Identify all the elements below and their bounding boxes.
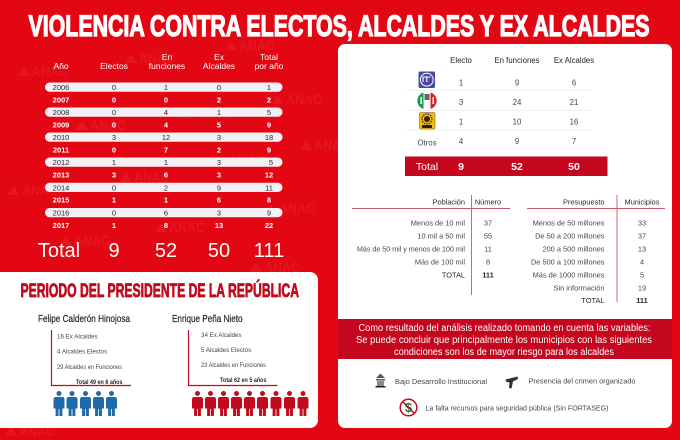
panel: yearly table bbox=[38, 52, 284, 262]
table header bbox=[53, 52, 284, 71]
table header: Total bbox=[260, 52, 278, 62]
icons: people red bbox=[192, 391, 308, 416]
party rows: 9 bbox=[515, 137, 519, 146]
table: budget: 200 a 500 millones bbox=[542, 244, 605, 254]
table rows: 8 bbox=[164, 221, 168, 230]
callout band: condiciones son los de mayor riesgo para los alcaldes bbox=[394, 347, 614, 358]
party totals: 50 bbox=[568, 161, 580, 173]
table rows: 2016 bbox=[53, 208, 69, 217]
table: budget: De 500 a 100 millones bbox=[531, 258, 605, 266]
table rows: 2014 bbox=[53, 183, 69, 192]
table rows: 1 bbox=[164, 83, 168, 92]
party totals: 9 bbox=[458, 161, 464, 173]
table header: En bbox=[162, 52, 172, 62]
table rows: 4 bbox=[164, 121, 169, 130]
table: budget: 13 bbox=[638, 244, 646, 254]
table: budget: 33 bbox=[638, 218, 646, 228]
table rows: 3 bbox=[217, 171, 221, 180]
table rows: 1 bbox=[112, 221, 116, 230]
table: budget: 111 bbox=[636, 296, 648, 305]
table header: Alcaldes bbox=[203, 61, 235, 71]
table totals bbox=[38, 240, 284, 262]
table rows: 12 bbox=[265, 171, 273, 180]
table rows: 7 bbox=[164, 146, 168, 155]
table rows: 1 bbox=[267, 83, 271, 92]
text: organized crime: Presencia del crimen organizado bbox=[528, 378, 636, 386]
table: budget: Sin información bbox=[554, 284, 604, 292]
table rows: 12 bbox=[162, 133, 170, 142]
table rows: 0 bbox=[112, 208, 116, 217]
icon: PRI logo bbox=[417, 92, 437, 109]
party rows: 16 bbox=[570, 118, 578, 126]
table rows: 3 bbox=[112, 171, 116, 180]
party table: Ex Alcaldes bbox=[554, 56, 594, 65]
table: population: 10 mil a 50 mil bbox=[417, 232, 465, 240]
table: budget: TOTAL bbox=[581, 296, 604, 305]
party rows: 10 bbox=[513, 118, 522, 126]
table: population: 111 bbox=[482, 270, 494, 280]
party rows: 21 bbox=[570, 98, 578, 107]
block: Peña Nieto: Total 62 en 5 años bbox=[220, 377, 267, 384]
table rows: 2 bbox=[217, 96, 221, 105]
block: Calderón: Felipe Calderón Hinojosa bbox=[38, 313, 130, 325]
table rows: 9 bbox=[217, 183, 221, 192]
table rows: 9 bbox=[267, 208, 271, 217]
table rows: 5 bbox=[269, 158, 273, 167]
party table: Electo bbox=[450, 56, 472, 65]
table rows: 1 bbox=[112, 196, 116, 205]
block: Peña Nieto bbox=[172, 313, 308, 416]
party rows bbox=[417, 78, 578, 148]
table totals: 9 bbox=[108, 240, 120, 262]
party totals: 52 bbox=[511, 161, 523, 173]
table header: Ex bbox=[214, 52, 225, 62]
party rows: 9 bbox=[515, 78, 519, 88]
table header: funciones bbox=[149, 61, 185, 71]
block: Peña Nieto: 23 Alcaldes en Funciones bbox=[201, 362, 266, 369]
table rows: 1 bbox=[217, 108, 221, 117]
table rows: 22 bbox=[265, 221, 273, 230]
table: population: Más de 50 mil y menos de 100 mil bbox=[357, 244, 465, 254]
table: population: 11 bbox=[484, 244, 492, 254]
table: budget: Presupuesto bbox=[563, 198, 604, 206]
table rows: 2 bbox=[267, 96, 271, 105]
table: population: Más de 100 mil bbox=[415, 258, 465, 266]
icon: building bbox=[376, 374, 386, 388]
heading: PERIODO DEL PRESIDENTE DE LA REPÚBLICA bbox=[20, 280, 299, 302]
block: Calderón: 4 Alcaldes Electos bbox=[57, 348, 107, 356]
table rows: 0 bbox=[112, 146, 116, 155]
party rows: 1 bbox=[459, 78, 463, 88]
icon: PRD logo bbox=[420, 112, 435, 129]
table: population: 55 bbox=[484, 232, 492, 240]
table rows: 1 bbox=[164, 158, 168, 167]
table rows: 0 bbox=[112, 96, 116, 105]
icons: people blue bbox=[54, 391, 117, 416]
block: Peña Nieto: 5 Alcaldes Electos bbox=[201, 347, 251, 354]
party totals: Total bbox=[416, 161, 438, 173]
table: budget bbox=[527, 195, 665, 305]
table rows bbox=[45, 82, 282, 230]
table rows: 0 bbox=[164, 96, 168, 105]
table rows: 4 bbox=[164, 108, 168, 117]
watermarks bbox=[5, 37, 350, 439]
table header: Año bbox=[53, 61, 69, 71]
table: population: 37 bbox=[484, 218, 492, 228]
icon: no money bbox=[400, 399, 417, 416]
block: Calderón: Total 49 en 6 años bbox=[76, 379, 123, 386]
icon: PAN logo bbox=[418, 72, 435, 88]
table rows: 5 bbox=[267, 108, 271, 117]
table: population: Población bbox=[433, 198, 465, 206]
callout band: Como resultado del análisis realizado tomando en cuenta las variables: bbox=[358, 323, 650, 334]
table totals: 50 bbox=[208, 240, 230, 262]
party table: En funciones bbox=[494, 56, 540, 65]
party rows: 3 bbox=[459, 98, 463, 107]
table rows: 6 bbox=[164, 208, 168, 217]
table rows: 3 bbox=[217, 158, 221, 167]
table rows: 2 bbox=[217, 146, 221, 155]
table rows: 2011 bbox=[53, 146, 69, 155]
table rows: 2013 bbox=[53, 171, 69, 180]
block: Peña Nieto: Enrique Peña Nieto bbox=[172, 313, 243, 325]
table rows: 3 bbox=[217, 208, 221, 217]
table rows: 2007 bbox=[53, 96, 69, 105]
table: population bbox=[352, 195, 510, 295]
table rows: 2 bbox=[164, 183, 168, 192]
table rows: 9 bbox=[267, 121, 271, 130]
table: population: Menos de 10 mil bbox=[411, 218, 465, 228]
table totals: Total bbox=[38, 240, 80, 262]
table rows: 5 bbox=[217, 121, 221, 130]
table rows: 2012 bbox=[53, 158, 69, 167]
table rows: 3 bbox=[112, 133, 116, 142]
table: budget: 5 bbox=[640, 270, 644, 280]
party rows: 1 bbox=[459, 118, 463, 126]
table: population: Número bbox=[475, 198, 501, 206]
table rows: 18 bbox=[265, 133, 273, 142]
panel: right bbox=[338, 44, 672, 428]
table header: Electos bbox=[100, 61, 128, 71]
table: budget: Más de 1000 millones bbox=[533, 270, 605, 280]
table rows: 11 bbox=[265, 183, 273, 192]
table rows: 8 bbox=[267, 196, 271, 205]
table rows: 0 bbox=[112, 183, 116, 192]
party totals bbox=[405, 156, 608, 176]
table rows: 6 bbox=[164, 171, 168, 180]
party rows: 4 bbox=[459, 137, 464, 146]
table rows: 2010 bbox=[53, 133, 69, 142]
table: budget: 19 bbox=[638, 284, 646, 292]
table rows: 0 bbox=[112, 108, 116, 117]
block: Calderón bbox=[38, 313, 131, 416]
callout band bbox=[338, 319, 672, 359]
table: budget: Municipios bbox=[625, 198, 660, 206]
table: budget: De 50 a 200 millones bbox=[535, 232, 605, 240]
table rows: 2006 bbox=[53, 83, 69, 92]
table rows: 2009 bbox=[53, 121, 69, 130]
table: population: 8 bbox=[486, 258, 490, 266]
party rows: 24 bbox=[513, 98, 522, 107]
table: budget: 37 bbox=[638, 232, 646, 240]
table rows: 1 bbox=[112, 158, 116, 167]
table: budget: 4 bbox=[640, 258, 644, 266]
table header: por año bbox=[255, 61, 284, 71]
table rows: 2008 bbox=[53, 108, 69, 117]
table rows: 0 bbox=[112, 83, 116, 92]
table: population: TOTAL bbox=[442, 270, 465, 280]
table rows: 13 bbox=[215, 221, 223, 230]
block: Calderón: 29 Alcaldes en Funciones bbox=[57, 364, 122, 371]
table rows: 0 bbox=[217, 83, 221, 92]
table rows: 3 bbox=[217, 133, 221, 142]
table rows: 9 bbox=[267, 146, 271, 155]
icon: no money: $ bbox=[405, 400, 413, 415]
party rows: Otros bbox=[417, 138, 437, 148]
table rows: 2015 bbox=[53, 196, 69, 205]
table totals: 52 bbox=[155, 240, 177, 262]
party rows: 6 bbox=[572, 78, 576, 88]
table rows: 6 bbox=[217, 196, 221, 205]
party table bbox=[405, 56, 608, 176]
callout band: Se puede concluir que principalmente los municipios con las siguientes bbox=[356, 335, 652, 346]
panel: presidential period bbox=[0, 272, 318, 428]
block: Calderón: 16 Ex Alcaldes bbox=[57, 334, 98, 340]
table rows: 1 bbox=[164, 196, 168, 205]
text: funding: La falta recursos para seguridad pública (Sin FORTASEG) bbox=[426, 406, 608, 412]
text: institutional development: Bajo Desarrollo Institucional bbox=[395, 379, 487, 386]
party rows: 7 bbox=[572, 137, 576, 146]
table rows: 0 bbox=[112, 121, 116, 130]
table rows: 2017 bbox=[53, 221, 69, 230]
table: budget: Menos de 50 millones bbox=[533, 218, 605, 228]
icon: gun bbox=[506, 376, 518, 388]
block: Peña Nieto: 34 Ex Alcaldes bbox=[201, 332, 242, 339]
table totals: 111 bbox=[254, 240, 284, 262]
